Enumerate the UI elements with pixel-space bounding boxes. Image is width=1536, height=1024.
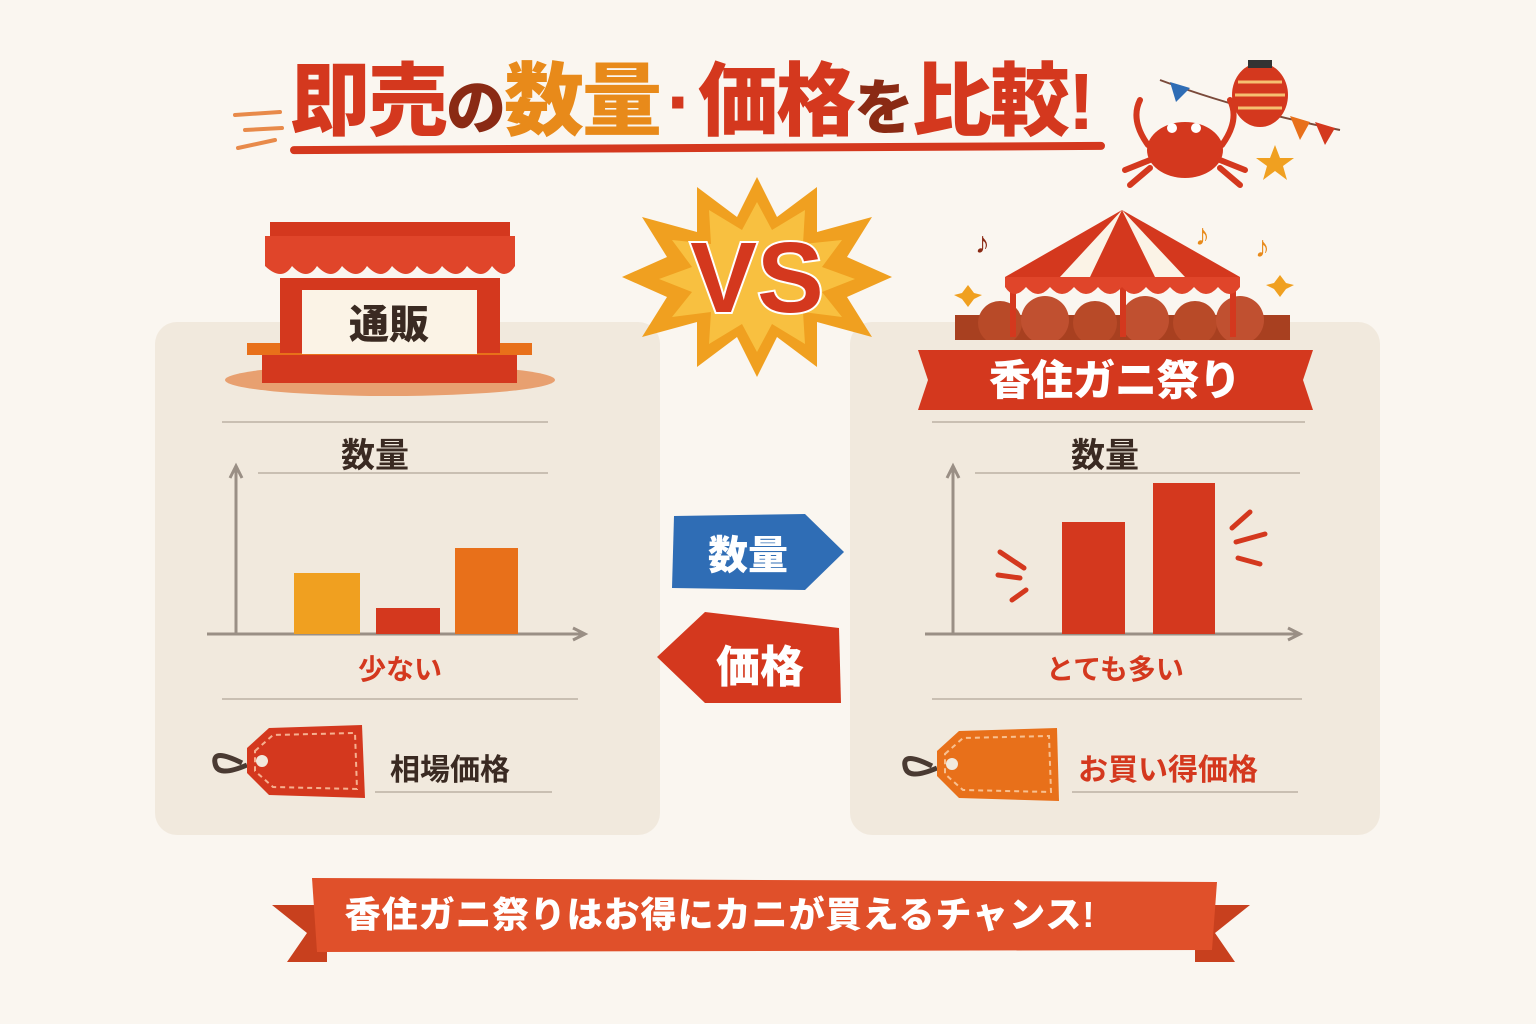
icon: price tag (bargain) <box>902 728 1059 801</box>
bar chart: online shop quantity <box>207 462 588 642</box>
banner: 香住ガニ祭り <box>918 350 1313 410</box>
title: · <box>667 57 691 146</box>
decorative speed lines <box>233 110 284 150</box>
heading: 数量 (right): 数量 <box>1071 437 1139 475</box>
bar chart: festival quantity <box>925 462 1304 642</box>
icon: festival tent: ♪ <box>975 227 990 260</box>
right panel content <box>902 421 1305 801</box>
panel: right background <box>850 322 1380 835</box>
label: 少ない: 少ない <box>358 654 442 685</box>
bottom ribbon banner <box>272 878 1250 962</box>
arrow: price (left-pointing red): 価格 <box>716 643 804 692</box>
icon: festival tent: ♪ <box>1195 219 1210 252</box>
label: 相場価格: 相場価格 <box>390 754 510 787</box>
icon: online shop storefront: 通販 <box>349 303 429 347</box>
icon: festival tent <box>954 210 1294 340</box>
label: とても多い: とても多い <box>1046 654 1184 685</box>
banner: 香住ガニ祭り: 香住ガニ祭り <box>989 357 1241 404</box>
icon: VS starburst: VS <box>690 222 824 334</box>
heading: 数量 (left): 数量 <box>341 437 409 475</box>
arrow: quantity (right-pointing blue) <box>672 514 844 590</box>
arrow: price (left-pointing red) <box>657 612 841 703</box>
icon: online shop storefront <box>225 222 555 396</box>
bottom ribbon banner: 香住ガニ祭りはお得にカニが買えるチャンス! <box>345 894 1095 935</box>
icon: crab and lantern festival decoration <box>1122 60 1340 188</box>
title: 即売の数量 価格を比較! <box>290 57 1093 146</box>
left panel content <box>207 421 588 798</box>
arrow: quantity (right-pointing blue): 数量 <box>708 534 788 578</box>
label: お買い得価格: お買い得価格 <box>1078 754 1258 787</box>
icon: VS starburst <box>622 177 892 377</box>
panel: left background <box>155 322 660 835</box>
icon: festival tent: ♪ <box>1255 231 1270 264</box>
icon: price tag (market price) <box>212 725 365 798</box>
